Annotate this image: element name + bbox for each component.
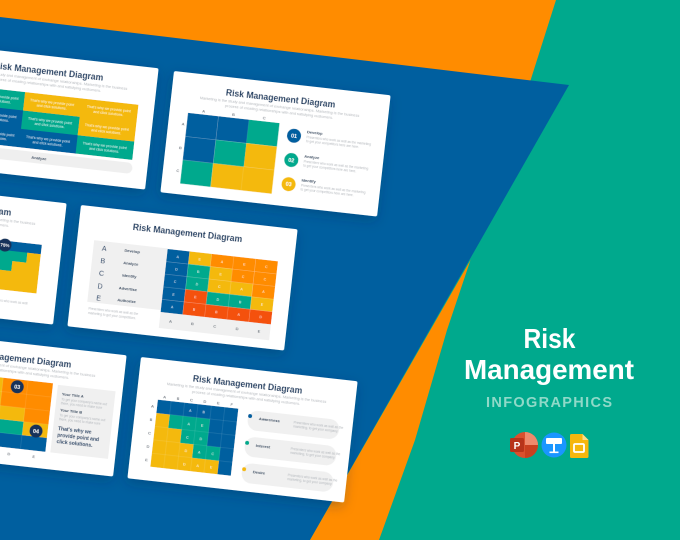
- heading: Risk Management: Management: [464, 354, 634, 385]
- side text panel: there, you need to make sure: [61, 401, 103, 410]
- marker 04: [29, 424, 43, 438]
- item 02: 02: [288, 158, 295, 164]
- item 01: to get your competitors here are here.: [306, 139, 359, 149]
- matrix: That's why we provide point: [30, 98, 74, 107]
- legend: desire: Presenters who work as well as the: [288, 473, 338, 483]
- axis labels: A: [163, 394, 167, 400]
- subtitle: Marketing is the study and management of exchange relationships. Marketing is the business: [167, 381, 327, 404]
- icon: PowerPoint: [510, 432, 538, 458]
- heat matrix: C: [265, 265, 268, 269]
- heat matrix: B: [197, 270, 200, 274]
- heat matrix: E: [172, 293, 176, 297]
- heat matrix: C: [173, 280, 177, 284]
- heat matrix: C: [218, 285, 221, 289]
- slide card 4: 5x5 heat matrix: [67, 205, 298, 351]
- heat matrix: E: [194, 295, 197, 300]
- item 01: 01: [291, 133, 297, 140]
- badge 75%: [0, 238, 12, 252]
- footnote: marketing to get your competitors.: [88, 311, 136, 320]
- legend panel: Develop: [124, 248, 141, 254]
- heading: Risk Management: [464, 323, 634, 385]
- matrix: C: [186, 436, 189, 440]
- matrix: A: [189, 409, 192, 413]
- title: Risk Management Diagram: [225, 86, 336, 110]
- legend panel: Authorize: [117, 297, 137, 304]
- heat matrix: A: [240, 287, 244, 292]
- matrix: A: [198, 450, 201, 455]
- legend panel: A: [101, 246, 107, 253]
- column header strip: [159, 312, 271, 340]
- subtitle line two: process of creating relationships with and satisfying customers.: [192, 389, 300, 406]
- axis labels: A: [202, 108, 206, 114]
- item 03: 03: [285, 182, 292, 188]
- item 01: Develop: [307, 129, 323, 136]
- matrix: [0, 234, 42, 293]
- item 03: Identify: [301, 178, 317, 184]
- icon: Google Slides: [570, 434, 588, 458]
- marker 03: [10, 380, 24, 394]
- marker 04: 04: [33, 429, 40, 435]
- slide card 3: stepped matrix with 75% badge: [0, 179, 67, 325]
- matrix: [150, 400, 238, 476]
- column labels: D: [7, 451, 11, 456]
- subtitle: Marketing is the study and management of exchange relationships. Marketing is the business: [200, 95, 360, 118]
- heat matrix: D: [195, 282, 199, 287]
- item 03: [281, 175, 367, 200]
- background: lower orange sliver: [310, 260, 470, 540]
- column header strip: D: [235, 326, 239, 331]
- column header strip: C: [213, 324, 217, 329]
- matrix: [0, 86, 138, 160]
- matrix: A: [187, 422, 191, 426]
- heat matrix: E: [243, 262, 246, 267]
- heat matrix: A: [176, 255, 180, 259]
- item 02: to get your competitors here are here.: [303, 163, 357, 173]
- background: top orange shape: [0, 0, 556, 82]
- matrix: A: [196, 464, 200, 468]
- column header strip: A: [169, 319, 173, 324]
- column labels: [7, 451, 36, 459]
- heat matrix: B: [215, 310, 218, 314]
- heat matrix: D: [175, 267, 178, 272]
- subtitle line two: process of creating relationships with and satisfying customers.: [225, 103, 333, 120]
- heat matrix: B: [239, 300, 242, 305]
- matrix: and click solutions.: [36, 103, 67, 111]
- item 03: to get your competitors here are here.: [300, 188, 354, 197]
- axis labels: E: [145, 457, 149, 462]
- legend: awareness: marketing, to get your company.: [293, 424, 339, 433]
- item 01: [286, 127, 372, 151]
- matrix: That's why we provide point: [82, 141, 127, 150]
- slide card 5: matrix with numbered markers: [0, 331, 127, 477]
- heat matrix: E: [198, 257, 202, 262]
- legend panel: B: [100, 258, 106, 266]
- item 02: Presenters who work as well as the marketing: [304, 159, 369, 171]
- axis labels: C: [190, 397, 193, 403]
- matrix: [180, 113, 280, 194]
- slide card 1: text matrix: [0, 44, 159, 190]
- item 01: Presenters who work as well as the marketing: [306, 135, 371, 146]
- marker 03: 03: [14, 384, 21, 391]
- axis labels: A: [151, 403, 155, 409]
- footnote: [88, 306, 139, 321]
- matrix: E: [201, 424, 204, 428]
- legend: interest: [244, 436, 341, 467]
- title: Risk Management Diagram: [132, 221, 243, 244]
- axis labels: B: [179, 145, 182, 150]
- axis labels: B: [177, 396, 180, 401]
- heat matrix: [161, 249, 278, 324]
- heat matrix: A: [171, 305, 174, 309]
- item 02: [284, 151, 369, 176]
- footnote: Presenters who work as well as the: [88, 306, 139, 316]
- legend panel: Analyze: [123, 260, 139, 267]
- legend: desire: marketing, to get your company.: [287, 477, 333, 486]
- axis labels: A: [182, 121, 185, 127]
- badge 75%: 75%: [0, 242, 10, 248]
- legend: desire: Desire: [253, 469, 266, 476]
- heat matrix: C: [241, 275, 245, 279]
- heat matrix: A: [237, 313, 241, 317]
- slide card 2: 3x3 matrix: [160, 71, 391, 217]
- side text panel: [50, 385, 116, 459]
- title: Risk Management Diagram: [192, 372, 303, 396]
- heat matrix: B: [193, 308, 196, 312]
- matrix: B: [202, 410, 206, 415]
- matrix: D: [183, 462, 186, 467]
- matrix: and click solutions.: [89, 147, 119, 154]
- heat matrix: A: [262, 290, 265, 294]
- legend panel: Advertise: [119, 285, 138, 292]
- heat matrix: D: [216, 298, 220, 302]
- legend: interest: Interest: [256, 443, 271, 450]
- legend: interest: Presenters who work as well as the: [290, 447, 341, 456]
- matrix: That's why we provide point: [85, 123, 129, 132]
- matrix: and click solutions.: [34, 122, 65, 129]
- legend: awareness: [247, 410, 344, 440]
- legend panel: Identify: [122, 273, 138, 279]
- subheading: infographics: INFOGRAPHICS: [486, 395, 612, 411]
- matrix: D: [184, 449, 188, 453]
- matrix: E: [210, 465, 213, 470]
- icon: Keynote: [542, 432, 566, 458]
- matrix: That's why we provide point: [26, 135, 70, 144]
- heat matrix: C: [263, 277, 267, 282]
- matrix: [0, 369, 53, 452]
- side text panel: click solutions.: [56, 439, 93, 449]
- legend panel: D: [97, 283, 103, 291]
- axis labels: C: [176, 168, 180, 173]
- item 03: Presenters who work as well as the marketing: [301, 184, 366, 195]
- axis labels: D: [203, 399, 207, 404]
- axis labels: B: [149, 417, 153, 422]
- side text panel: Your Title B: [60, 407, 82, 415]
- heading: Risk Management: Risk: [524, 323, 576, 354]
- slide card 6: stepped matrix with legend pills: [127, 357, 358, 503]
- item 02: Analyze: [304, 153, 320, 160]
- side text panel: That's why we: [58, 426, 92, 436]
- heat matrix: A: [221, 260, 224, 264]
- axis labels: [176, 106, 266, 182]
- axis labels: D: [146, 444, 150, 449]
- side text panel: there, you need to make sure: [59, 417, 101, 426]
- analyze bar: Analyze: [31, 155, 47, 161]
- axis labels: F: [230, 402, 234, 407]
- legend: awareness: Awareness: [259, 416, 281, 423]
- legend: desire: [241, 463, 338, 493]
- legend panel: E: [96, 295, 102, 303]
- axis labels: B: [232, 112, 235, 117]
- matrix: C: [211, 452, 215, 456]
- column header strip: B: [191, 321, 194, 326]
- axis labels: C: [148, 430, 151, 436]
- axis labels: [145, 393, 234, 471]
- axis labels: C: [263, 115, 266, 121]
- column labels: E: [32, 454, 36, 459]
- matrix: D: [199, 437, 203, 441]
- legend: interest: marketing, to get your company.: [290, 451, 336, 460]
- side text panel: To get your company's name out: [61, 397, 107, 406]
- side text panel: Your Title A: [62, 391, 84, 399]
- matrix: That's why we provide point: [87, 105, 131, 113]
- matrix: That's why we provide point: [28, 117, 72, 125]
- legend: awareness: Presenters who work as well as the: [293, 420, 344, 430]
- column header strip: E: [257, 328, 261, 334]
- side text panel: To get your company's name out: [59, 413, 106, 422]
- heat matrix: E: [219, 272, 223, 277]
- side text panel: provide point and: [57, 433, 99, 443]
- matrix: and click solutions.: [93, 110, 124, 117]
- matrix: and click solutions.: [32, 140, 63, 148]
- legend panel: [87, 240, 168, 310]
- matrix: and click solutions.: [91, 128, 121, 136]
- icon: PowerPoint: P: [514, 441, 521, 452]
- analyze bar: [0, 142, 133, 174]
- legend panel: C: [99, 270, 104, 278]
- axis labels: E: [217, 400, 220, 406]
- heat matrix: D: [259, 315, 263, 319]
- heat matrix: E: [261, 303, 264, 307]
